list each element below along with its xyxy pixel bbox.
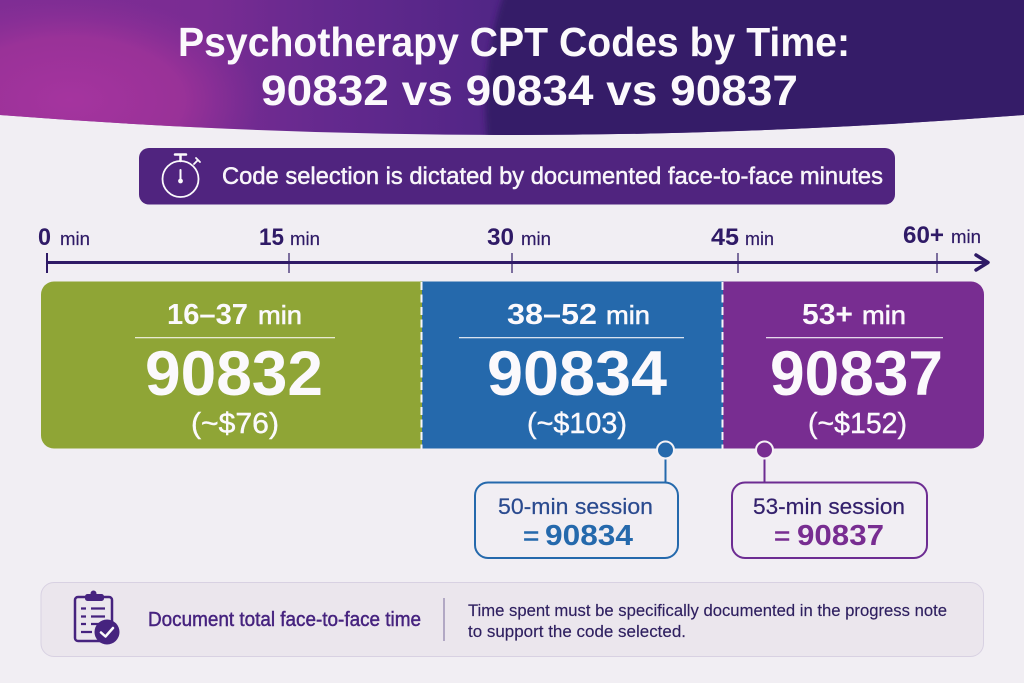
axis labels: min (951, 227, 981, 247)
panel: 90834: 38–52 (507, 299, 597, 331)
icon: stopwatch (162, 154, 200, 197)
panel: 90834: min (606, 300, 650, 330)
callout: 53-min session: 90837 (797, 520, 884, 552)
panel: 90832: min (258, 300, 302, 330)
title (178, 19, 850, 115)
callout: 50-min session: 50-min session (498, 494, 653, 519)
panel: 90837: 53+ (802, 299, 853, 331)
callout: 50-min session: 90834 (545, 520, 633, 552)
timeline axis (38, 222, 988, 273)
axis labels: min (290, 229, 320, 249)
panel: 90837: (~$152) (808, 408, 907, 440)
axis line and arrow (47, 253, 988, 273)
panel: 90834: (~$103) (527, 408, 627, 440)
icon: clipboard with check (75, 590, 120, 644)
panel: 90837: 90837 (770, 339, 943, 409)
panel: 90837: min (862, 300, 906, 330)
axis labels: min (745, 229, 774, 249)
panel: 90832 (135, 299, 335, 440)
callout: 53-min session: = (774, 520, 790, 551)
axis labels: 60+ (903, 222, 944, 249)
callout: 50-min session (475, 442, 678, 558)
note body: to support the code selected. (468, 622, 686, 641)
code time bar (41, 281, 984, 449)
axis labels: 0 (38, 224, 51, 251)
callout: 50-min session: = (523, 520, 539, 551)
panel: 90834: 90834 (487, 339, 667, 409)
note body (468, 601, 947, 641)
panel: documentation note (41, 582, 984, 656)
callout: 53-min session: 53-min session (753, 494, 905, 519)
panel: 90832: (~$76) (191, 408, 279, 440)
axis labels: 45 (711, 224, 739, 251)
callout: 53-min session (732, 442, 927, 558)
axis labels: min (60, 229, 90, 249)
header band (0, 0, 1024, 146)
axis labels: 15 (259, 224, 284, 251)
axis labels: min (521, 229, 551, 249)
note body: Time spent must be specifically documented in the progress note (468, 601, 947, 620)
panel: 90834 (459, 299, 684, 440)
panel: 90832: 90832 (145, 339, 323, 409)
title: Psychotherapy CPT Codes by Time: (178, 19, 850, 65)
note heading: Document total face-to-face time (148, 609, 421, 631)
axis labels (38, 222, 981, 251)
banner text: Code selection is dictated by documented face-to-face minutes (222, 163, 883, 190)
title: 90832 vs 90834 vs 90837 (261, 67, 798, 115)
panel: 90832: 16–37 (167, 299, 248, 331)
panel: 90837 (766, 299, 943, 440)
banner: code selection (139, 148, 895, 204)
axis labels: 30 (487, 224, 514, 251)
